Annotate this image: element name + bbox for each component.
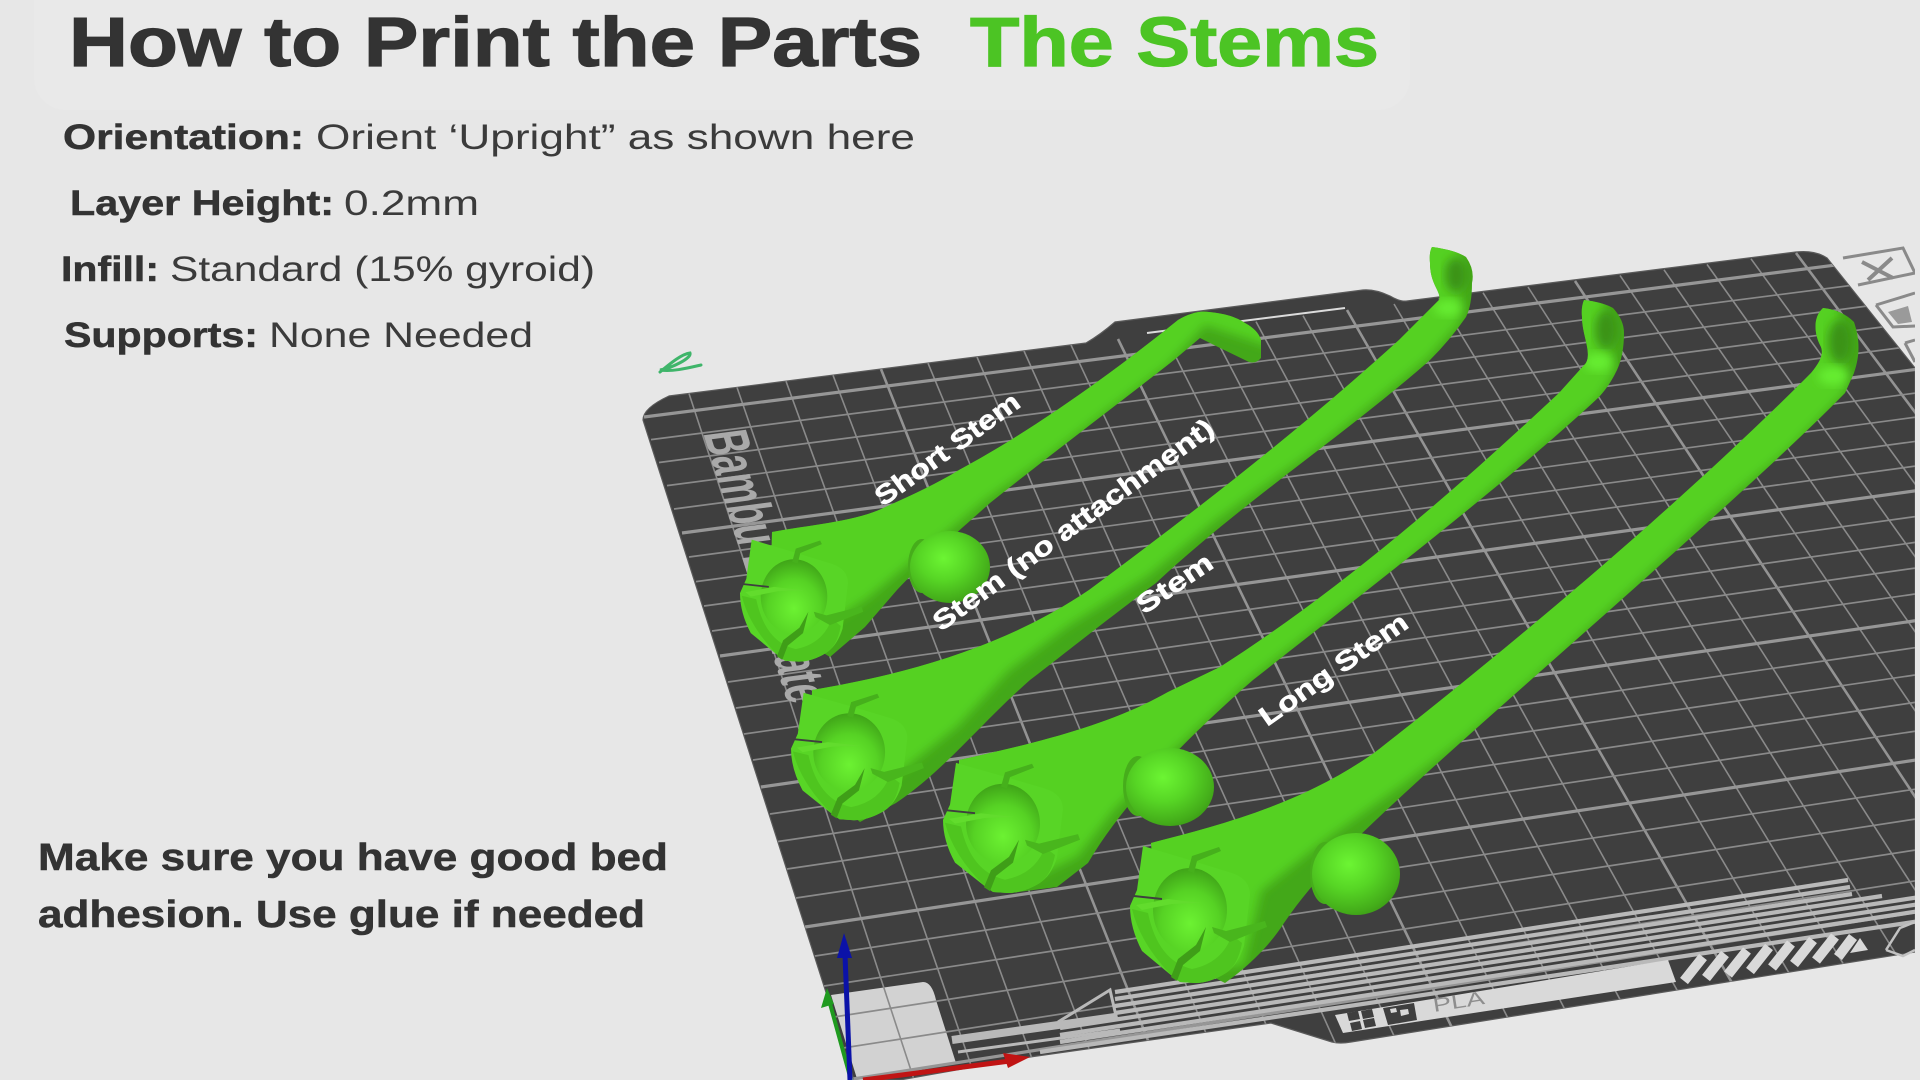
ball joint: [1123, 748, 1214, 826]
stem labels: [869, 386, 1414, 732]
plate corner icons: [1843, 248, 1915, 362]
title: The Stems: [970, 3, 1379, 81]
print bed plate: [643, 248, 1920, 1080]
plate brand text: Bambu Lab Plate: [689, 426, 843, 707]
filament label strip: [1335, 960, 1676, 1033]
label: short stem: Short Stem: [869, 386, 1026, 512]
setting: supports: Supports:: [64, 316, 258, 355]
purge line stripes: [952, 880, 1920, 1052]
icon: green squiggle: [660, 353, 701, 372]
axis: blue z: [837, 933, 852, 1080]
setting: orientation: Orient ‘Upright” as shown here: [316, 118, 915, 157]
socket head: [791, 693, 924, 820]
bed adhesion note: [38, 837, 668, 936]
label: stem no attachment: Stem (no attachment): [927, 413, 1220, 637]
label: stem: Stem: [1131, 547, 1219, 620]
setting: infill: Standard (15% gyroid): [170, 250, 595, 289]
filament label: PLA: PLA: [1431, 988, 1487, 1017]
hatch end triangle: [1850, 938, 1868, 953]
plate surface: [643, 252, 1915, 1080]
title: [69, 3, 1379, 81]
print settings: [61, 118, 915, 355]
setting: infill: Infill:: [61, 250, 159, 289]
label strip code icons: [1347, 1003, 1417, 1031]
stem: standard stem: [930, 280, 1624, 900]
setting: layer height: Layer Height:: [70, 184, 334, 223]
origin corner square: [831, 982, 956, 1080]
socket head: [943, 763, 1080, 893]
image right edge strip: [1915, 0, 1920, 1080]
ball joint: [908, 531, 990, 603]
axis: red x: [863, 1053, 1030, 1080]
stem: long stem: [1110, 290, 1858, 983]
setting: infill: [61, 250, 595, 289]
stem: no attachment: [780, 220, 1473, 830]
ball joint: [1310, 833, 1400, 915]
bed adhesion note: Make sure you have good bed: [38, 837, 668, 879]
socket head: [740, 540, 863, 662]
hatch stripes: [1684, 936, 1853, 981]
plate highlight line: [1147, 308, 1345, 333]
corner icon: cube: [1886, 922, 1915, 956]
bed adhesion note: adhesion. Use glue if needed: [38, 894, 645, 936]
setting: orientation: Orientation:: [63, 118, 304, 157]
setting: layer height: [70, 184, 479, 223]
header panel: [34, 0, 1410, 110]
title: How to Print the Parts: [69, 3, 922, 81]
stem: short stem: [740, 312, 1261, 662]
setting: orientation: [63, 118, 915, 157]
axis: green y: [821, 988, 851, 1080]
socket head: [1130, 846, 1267, 983]
label: long stem: Long Stem: [1253, 607, 1414, 732]
setting: supports: [64, 316, 533, 355]
setting: layer height: 0.2mm: [344, 184, 479, 223]
axis indicator: [821, 933, 1030, 1080]
setting: supports: None Needed: [269, 316, 533, 355]
